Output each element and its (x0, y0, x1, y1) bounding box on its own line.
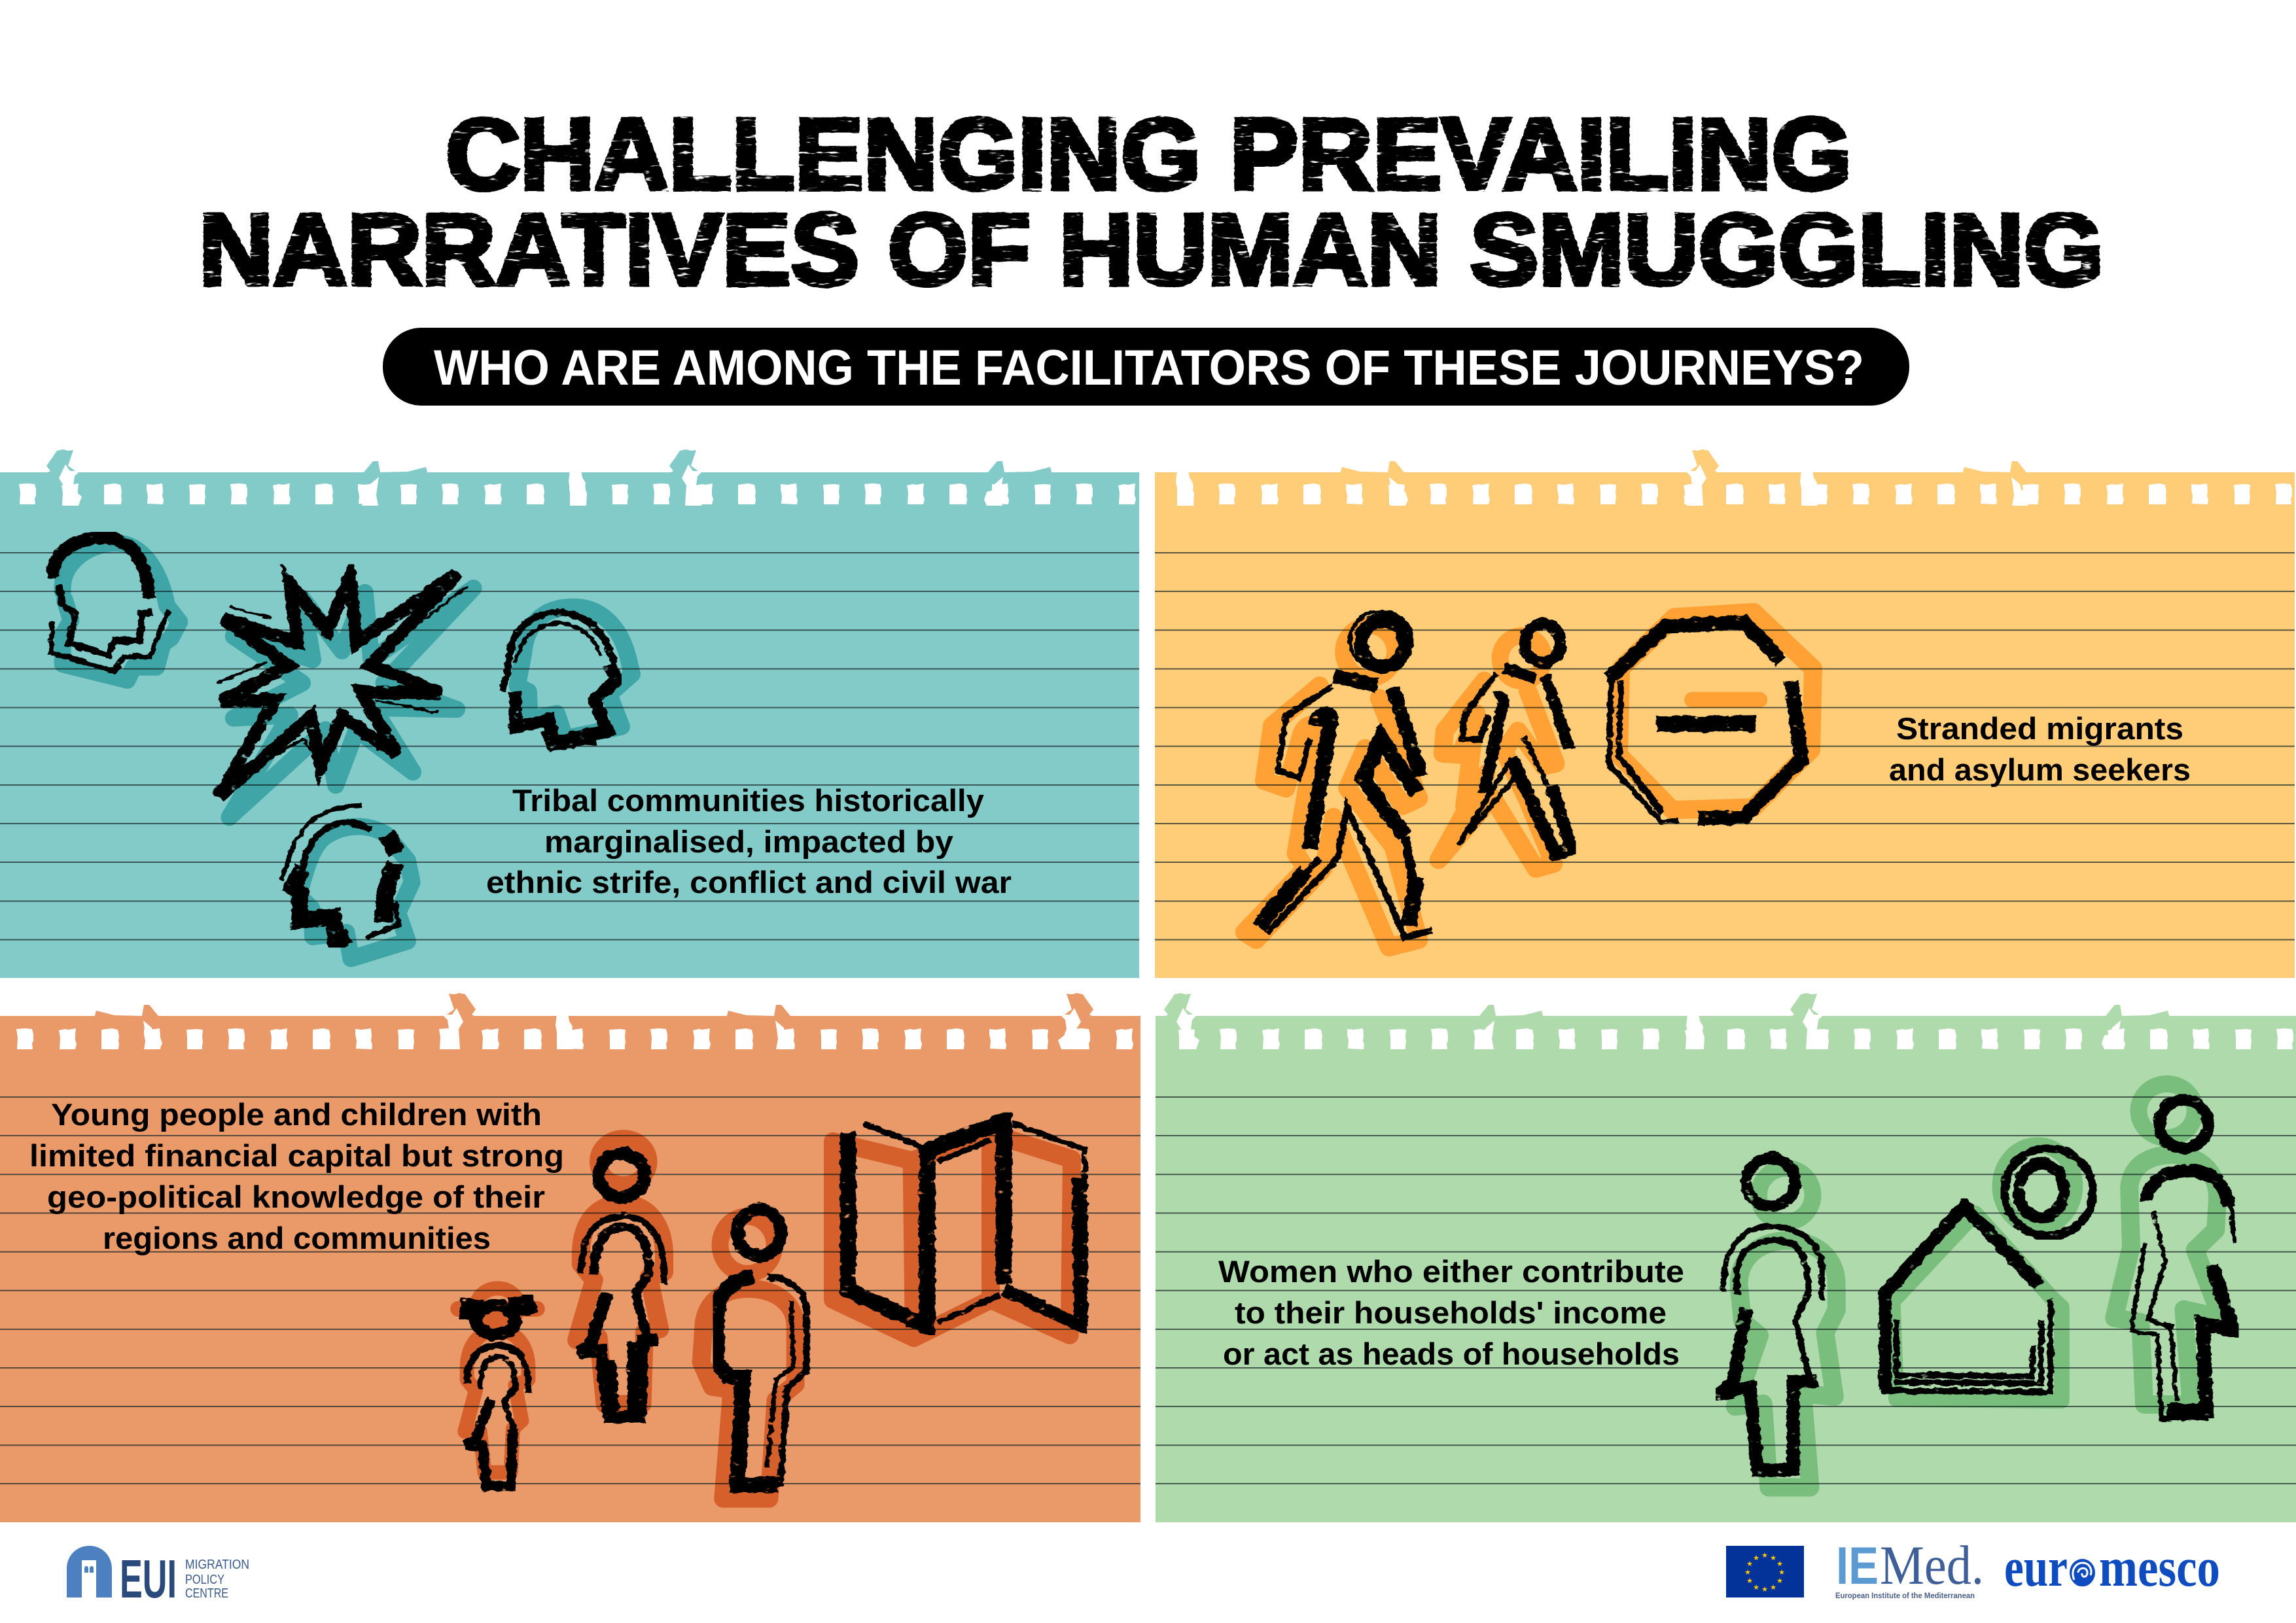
logo: euromesco: eur (2004, 1537, 2068, 1598)
logo: EU flag: ★ (1753, 1554, 1759, 1562)
logo: EU flag: ★ (1776, 1577, 1783, 1585)
logo: EU flag: ★ (1746, 1560, 1753, 1568)
icon: walking person small (1439, 623, 1571, 869)
title: NARRATIVES OF HUMAN SMUGGLING (199, 193, 2104, 306)
icon: head top left (51, 538, 179, 680)
text: tribal communities: Tribal communities historically (512, 783, 984, 818)
logo: IEMed: IE (1836, 1537, 1879, 1596)
logo: EU flag: ★ (1770, 1583, 1776, 1592)
logo: EU flag: ★ (1761, 1585, 1768, 1594)
icon: woman figure (576, 1138, 664, 1416)
icon: explosion (217, 574, 474, 817)
text: stranded migrants: and asylum seekers (1889, 752, 2191, 787)
text: women: or act as heads of households (1223, 1336, 1680, 1371)
icon: head bottom (281, 806, 412, 958)
logo: EUI Migration Policy Centre: CENTRE (185, 1586, 228, 1601)
icon: man figure (701, 1210, 807, 1499)
title (199, 97, 2104, 306)
text: tribal communities (486, 783, 1012, 899)
logo: EUI Migration Policy Centre (67, 1546, 249, 1609)
logo: EU flag: ★ (1744, 1568, 1751, 1577)
icon: child figure (458, 1288, 537, 1486)
logo: EU flag: ★ (1761, 1551, 1768, 1560)
title: CHALLENGING PREVAILING (446, 97, 1852, 211)
logo: EUI Migration Policy Centre: MIGRATION (185, 1558, 249, 1572)
logo: EUI Migration Policy Centre: EUI (120, 1548, 177, 1609)
icon: walking person large (1245, 611, 1432, 947)
logo: IEMed: European Institute of the Mediterranean (1835, 1592, 1975, 1600)
panel: women (1156, 993, 2296, 1522)
panel: tribal communities (0, 449, 1139, 978)
icon: woman left (1720, 1158, 1837, 1488)
logo: EU flag: ★ (1753, 1583, 1759, 1592)
icon: head right (503, 607, 632, 750)
text: women (1218, 1254, 1684, 1371)
text: young people and children: limited financial capital but strong (29, 1138, 564, 1173)
logo: EU flag (1726, 1546, 1804, 1597)
panel: young people and children (0, 993, 1140, 1522)
text: tribal communities: marginalised, impacted by (544, 824, 953, 859)
logo: EU flag: ★ (1776, 1560, 1783, 1568)
text: tribal communities: ethnic strife, conflict and civil war (486, 865, 1012, 899)
logo: IEMed: Med. (1880, 1535, 1984, 1596)
logo: IEMed (1835, 1535, 1984, 1600)
logo: EU flag: ★ (1778, 1568, 1785, 1577)
icon: head above house (2000, 1145, 2093, 1236)
icon: stop sign (1609, 612, 1813, 822)
logo: EU flag: ★ (1770, 1554, 1776, 1562)
logo: EUI Migration Policy Centre: POLICY (185, 1573, 224, 1587)
text: stranded migrants: Stranded migrants (1896, 711, 2183, 746)
text: young people and children: regions and communities (103, 1221, 491, 1255)
logo: euromesco (2004, 1537, 2220, 1598)
text: women: to their households' income (1235, 1295, 1667, 1330)
text: young people and children (29, 1097, 564, 1255)
text: young people and children: Young people and children with (51, 1097, 542, 1132)
subtitle pill (383, 328, 1909, 406)
logo: EU flag: ★ (1746, 1577, 1753, 1585)
icon: house (1882, 1206, 2062, 1401)
panel: stranded migrants (1155, 449, 2295, 978)
text: women: Women who either contribute (1218, 1254, 1684, 1289)
subtitle pill: WHO ARE AMONG THE FACILITATORS OF THESE JOURNEYS? (434, 340, 1864, 396)
icon: folded map (833, 1121, 1085, 1338)
text: young people and children: geo-political knowledge of their (47, 1179, 545, 1214)
text: stranded migrants (1889, 711, 2191, 787)
icon: woman right (2114, 1084, 2234, 1419)
logo: euromesco: mesco (2099, 1537, 2220, 1598)
logo: euromesco: o (2070, 1537, 2095, 1598)
